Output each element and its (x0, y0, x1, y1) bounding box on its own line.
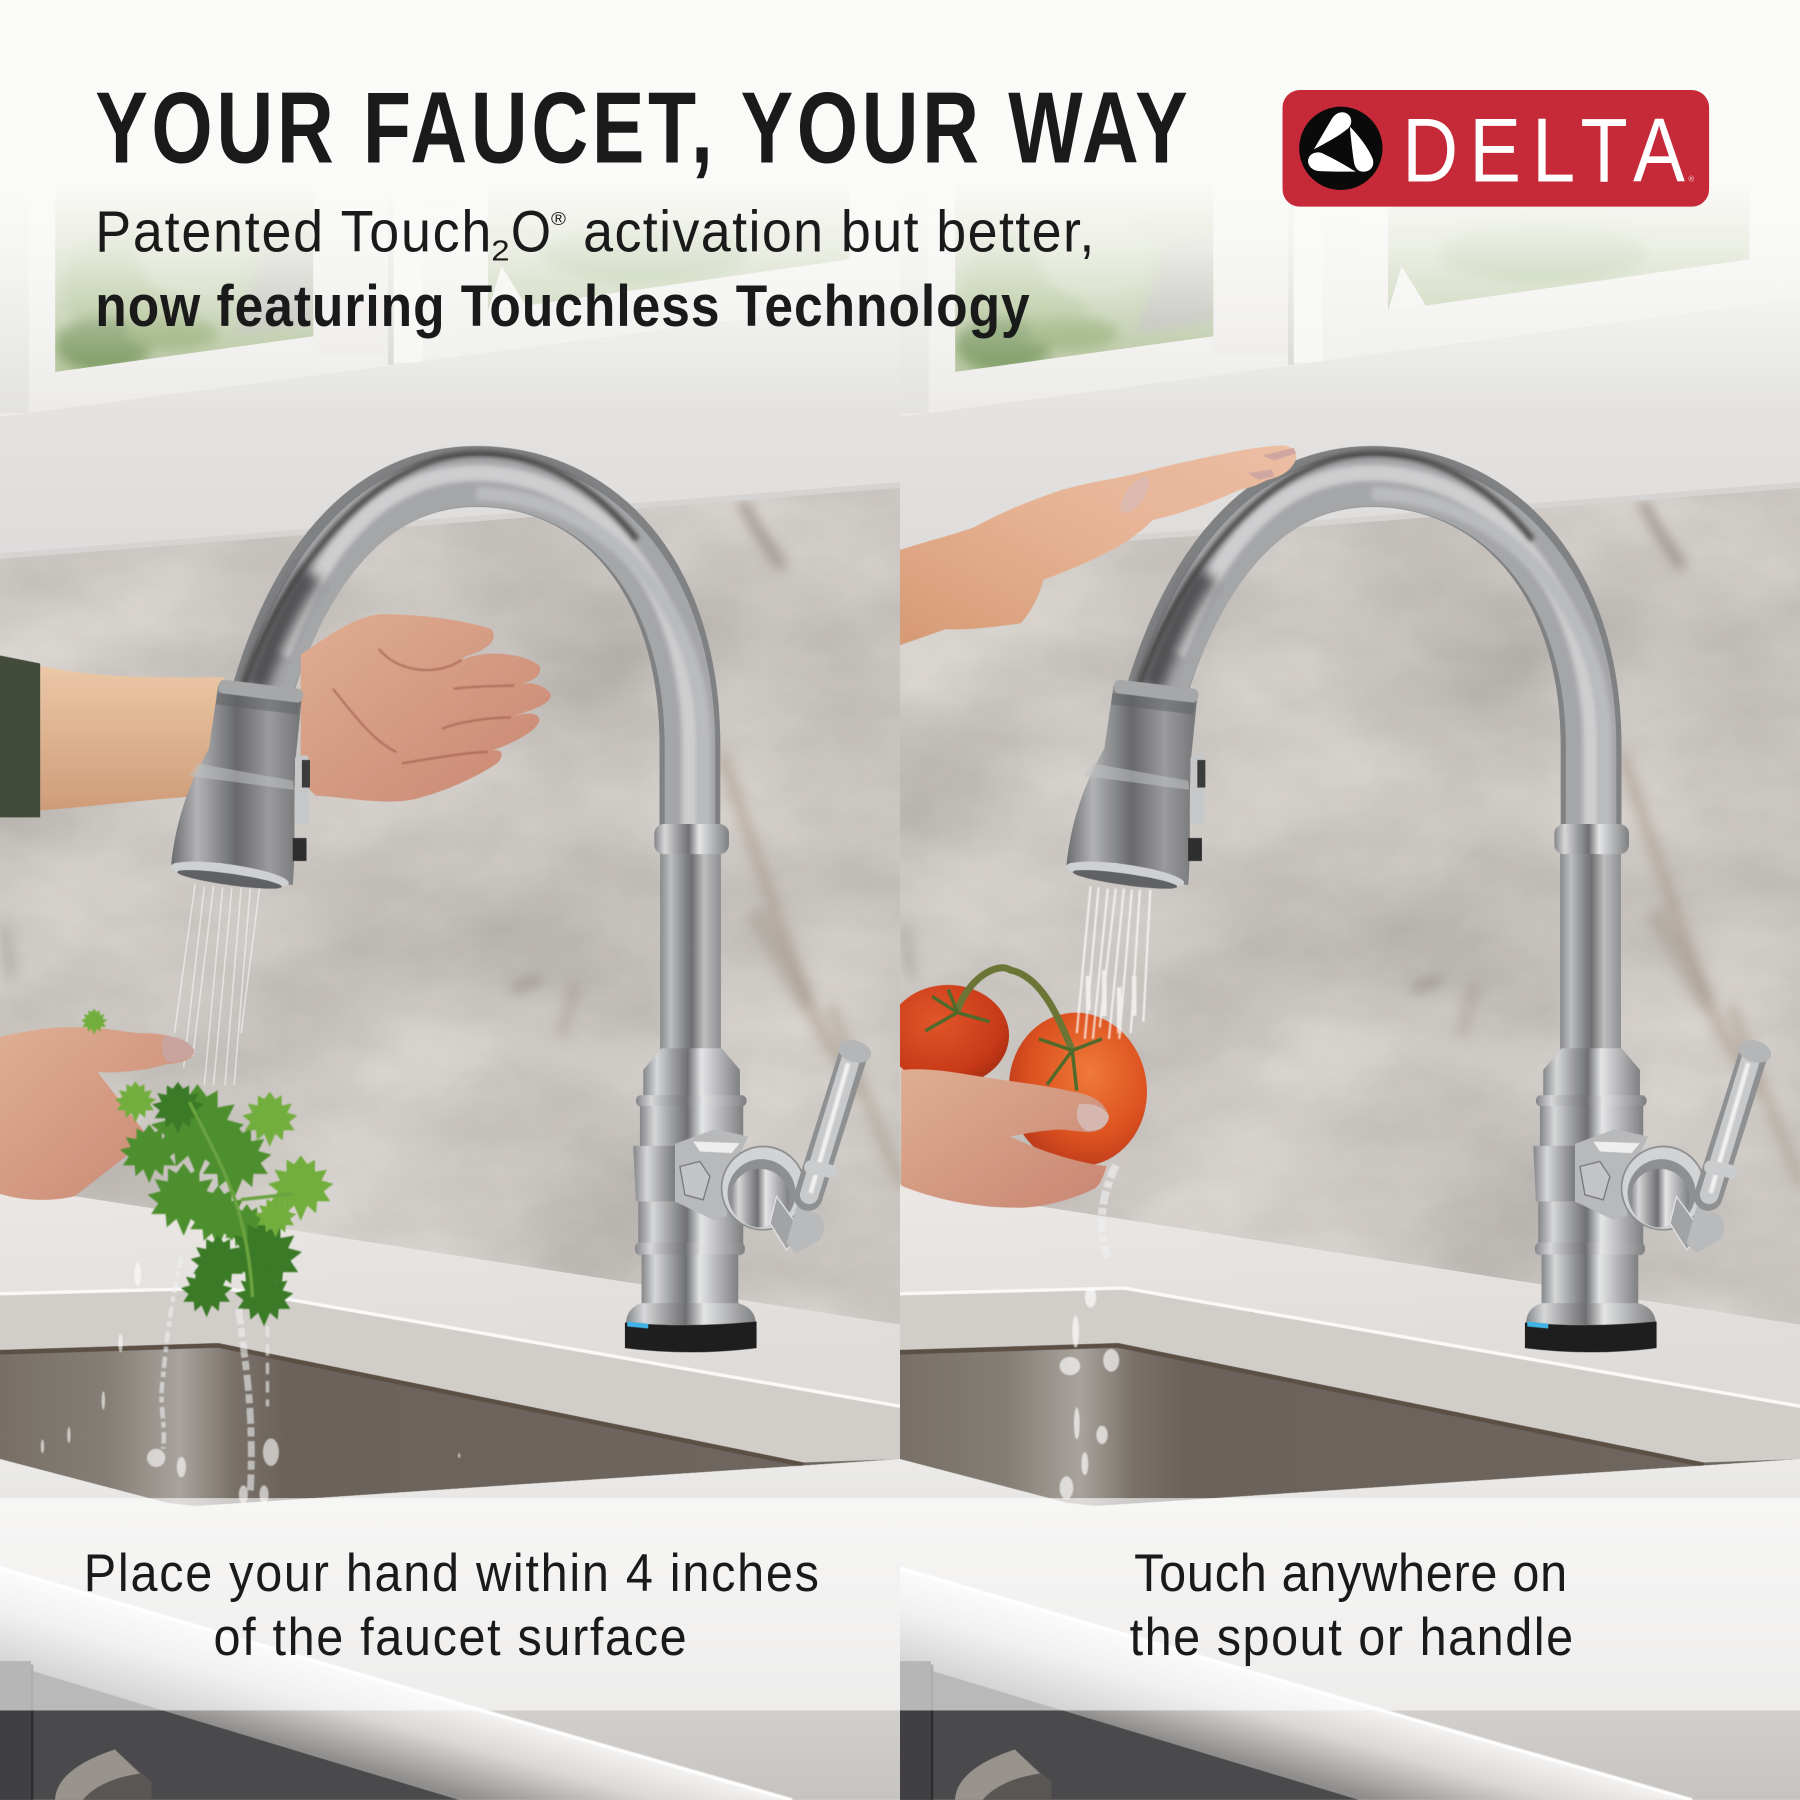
left scene background: kitchen window, wall, marble backsplash, counter, sink and cabinet (0, 0, 900, 1800)
subtitle line: Patented Touch2O activation but better: O (511, 199, 551, 264)
hand touching the spout (900, 445, 1296, 645)
hand near the spray head (301, 614, 551, 802)
spray head (169, 679, 310, 893)
water spray (174, 884, 259, 1085)
Delta logo: ® (1688, 174, 1694, 183)
panel: right touch activation photo (887, 445, 1774, 1499)
caption overlay band (0, 1498, 1800, 1710)
right caption: the spout or handle (1130, 1607, 1573, 1666)
subtitle line: Patented Touch2O activation but better (95, 198, 1094, 268)
faucet stem, base and handle (625, 824, 874, 1352)
Delta logo (1283, 90, 1709, 207)
faucet spout arch (241, 453, 704, 829)
cilantro bunch (81, 1009, 333, 1326)
panel: left touchless activation photo (0, 453, 874, 1504)
faucet stem, base and handle (1525, 824, 1774, 1352)
subtitle line: Patented Touch2O activation but better: Patented Touch (95, 198, 491, 264)
Delta logo: DELTA (1402, 99, 1685, 201)
hand holding cilantro (0, 1027, 194, 1200)
falling water droplets (1060, 1165, 1119, 1499)
water spray (1077, 886, 1150, 1039)
subtitle line: Patented Touch2O activation but better: ® (551, 208, 566, 229)
faucet spout arch (1136, 453, 1605, 829)
right scene background: same kitchen (900, 0, 1800, 1800)
sleeve and forearm (0, 655, 224, 817)
subtitle line: now featuring Touchless Technology: now featuring Touchless Technology (95, 273, 1030, 339)
hand holding tomatoes (901, 1069, 1109, 1208)
left caption: Place your hand within 4 inches (84, 1543, 819, 1603)
subtitle line: Patented Touch2O activation but better: 2 (491, 236, 510, 268)
spray head (1064, 679, 1205, 893)
left caption (84, 1543, 819, 1666)
left caption: of the faucet surface (214, 1607, 687, 1666)
right caption: Touch anywhere on (1134, 1543, 1567, 1603)
tomatoes (900, 964, 1147, 1164)
right caption (1130, 1543, 1573, 1666)
top white gradient band behind heading (0, 0, 1800, 413)
falling water droplets (41, 1257, 460, 1504)
subtitle line: Patented Touch2O activation but better: activation but better, (583, 198, 1094, 264)
title: YOUR FAUCET, YOUR WAY (95, 72, 1188, 185)
